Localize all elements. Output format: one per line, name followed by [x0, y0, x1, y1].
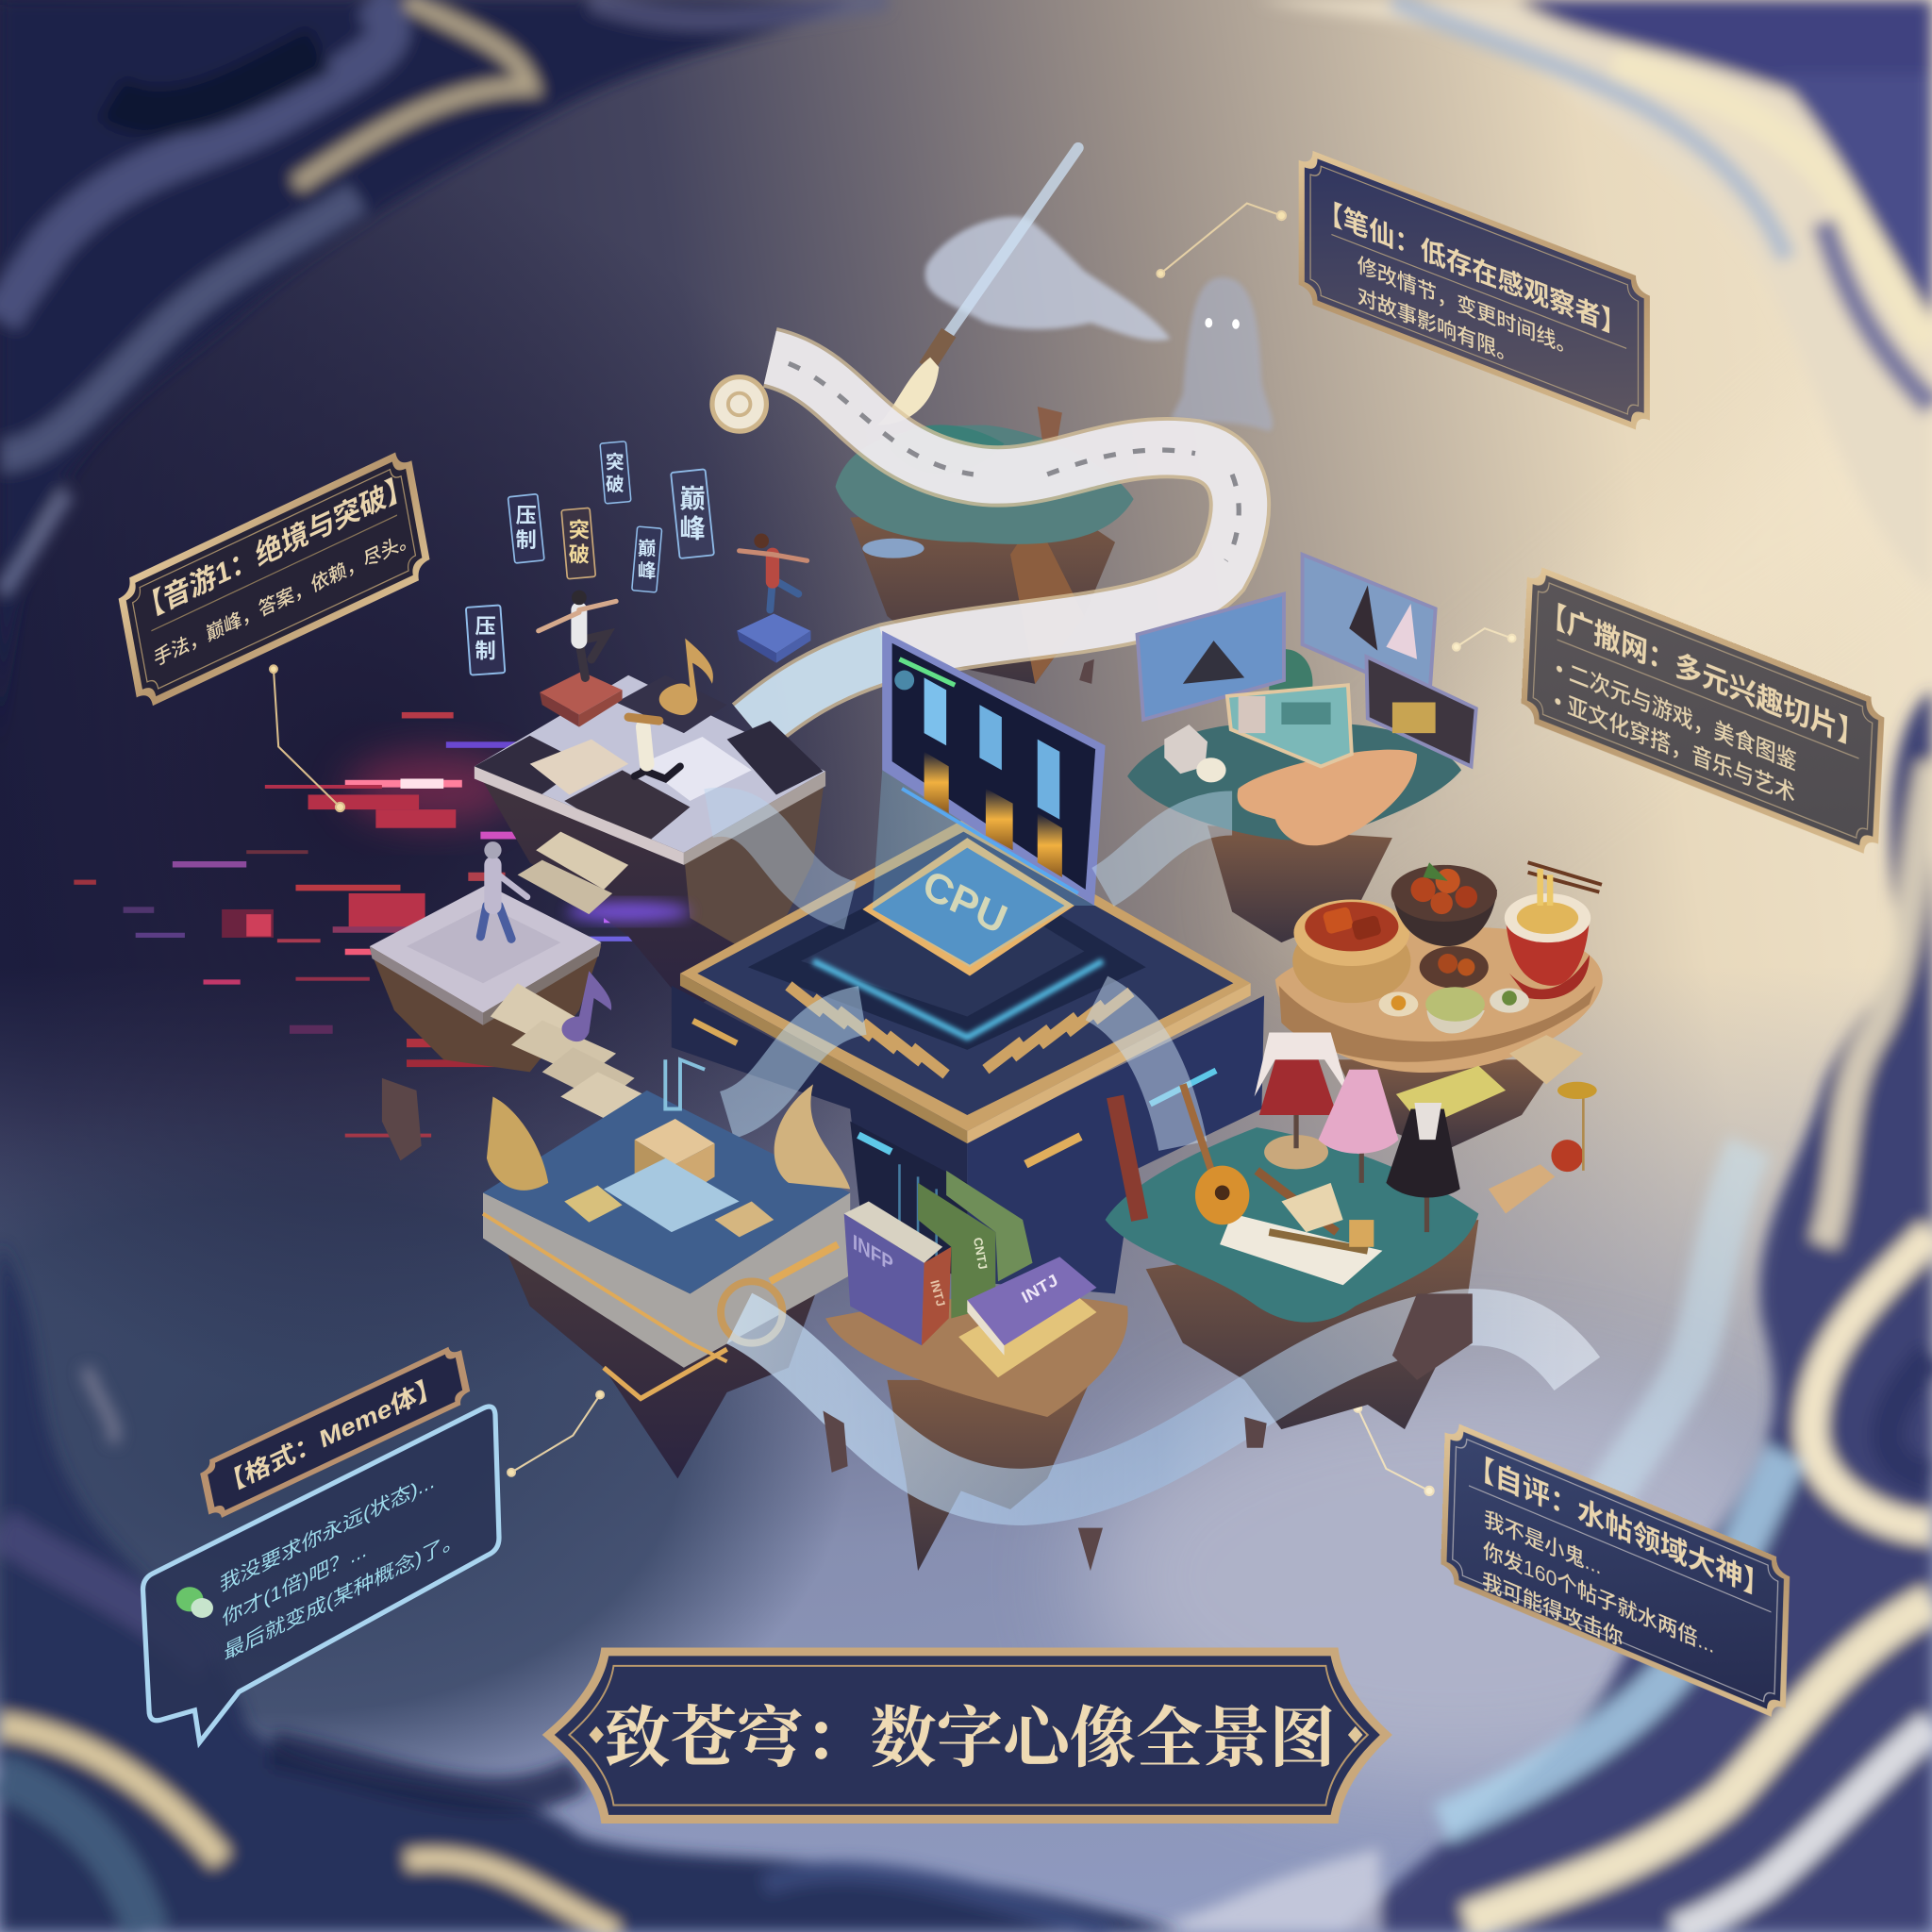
- floating tag: suppress one: [466, 605, 505, 675]
- floating tag: breakthrough one: [561, 508, 595, 579]
- MBTI books: INTJ: [1018, 1270, 1060, 1307]
- panel title: 【格式：Meme体】: [217, 1370, 444, 1501]
- callout line: self review: [1354, 1405, 1434, 1495]
- central processor platform: [680, 820, 1251, 1143]
- callout line: wide interests: [1453, 628, 1516, 651]
- panel body third line: 我可能得攻击你: [1482, 1569, 1624, 1651]
- hologram rays: [873, 770, 1096, 967]
- panel body: • 二次元与游戏，美食图鉴: [1555, 655, 1797, 775]
- dancer figures on blocks: [480, 534, 810, 939]
- panel body second line: • 亚文化穿搭，音乐与艺术: [1554, 688, 1796, 808]
- floating tag: peak two: 巅: [679, 484, 706, 513]
- scroll ribbon with writing: [712, 358, 1240, 727]
- ghost hand holding brush: [877, 148, 1171, 425]
- floating tag: peak two: 峰: [679, 513, 706, 542]
- MBTI books: [844, 1171, 1096, 1377]
- panel body second line: 你发160个帖子就水两倍...: [1483, 1538, 1715, 1657]
- processor chip with pins: [748, 838, 1146, 1074]
- message line three: 最后就变成(某种概念)了。: [224, 1525, 463, 1664]
- swirling ink frame: bottom left: [0, 1244, 1183, 1932]
- floating tag: peak two: [671, 469, 714, 558]
- floating tag: suppress two: 制: [516, 528, 537, 552]
- panel title: 【广撒网：多元兴趣切片】: [1539, 594, 1865, 756]
- panel: writer: [1299, 145, 1650, 435]
- steamer with braised pork: [1292, 899, 1411, 1003]
- MBTI books: INTJ: [927, 1278, 948, 1307]
- panel body: 手法，巅峰，答案，依赖，尽头。: [152, 526, 418, 671]
- floating tag: suppress one: 压: [475, 614, 496, 638]
- swirling ink frame: top right: [1257, 0, 1932, 591]
- title text: 致苍穹：数字心像全景图: [604, 1702, 1336, 1775]
- title banner: [542, 1647, 1392, 1824]
- stair slabs: [491, 832, 653, 1127]
- left data stream: [708, 812, 850, 906]
- panel title: 【笔仙：低存在感观察者】: [1318, 193, 1626, 344]
- panel: format: [198, 1341, 472, 1523]
- floating tag: suppress two: [508, 494, 544, 563]
- panel: self review: [1441, 1418, 1790, 1723]
- swirling ink frame: top left: [0, 0, 887, 764]
- icon: wechat: [176, 1587, 213, 1618]
- processor chip with pins: CPU: [920, 859, 1010, 945]
- guitar and instruments: [1115, 1084, 1368, 1251]
- swirling ink frame: right side: [1134, 690, 1932, 1932]
- mannequins with dresses: [1255, 1033, 1460, 1247]
- panel title: 【音游1：绝境与突破】: [135, 468, 415, 628]
- MBTI books: CNTJ: [971, 1237, 991, 1271]
- floating tag: suppress two: 压: [516, 504, 537, 527]
- callout line: writer: [1157, 204, 1286, 277]
- food island: [1275, 927, 1603, 1152]
- message line one: 我没要求你永远(状态)...: [220, 1469, 435, 1596]
- bowl of meat: [1391, 862, 1497, 946]
- lower left data stream: [727, 1010, 862, 1115]
- panel title: 【自评：水帖领域大神】: [1467, 1447, 1771, 1607]
- message line two: 你才(1倍)吧？...: [222, 1538, 367, 1630]
- floating tag: breakthrough two: [600, 441, 631, 504]
- central processor base walls: [672, 986, 1264, 1293]
- floating tag: breakthrough two: 破: [606, 475, 625, 495]
- music notes: [562, 639, 713, 1041]
- screen island: [1127, 649, 1461, 942]
- ghost figure: [1171, 277, 1273, 431]
- bottom flowing ribbon: [740, 1317, 1577, 1497]
- callout line: rhythm game: [270, 665, 344, 811]
- panel body: 修改情节，变更时间线。: [1357, 253, 1576, 360]
- bottom left machine island: [483, 1059, 850, 1478]
- floating tag: peak one: 峰: [638, 560, 657, 581]
- right data stream: [1103, 813, 1232, 887]
- floating tag: peak one: 巅: [638, 539, 657, 559]
- panel body second line: 对故事影响有限。: [1357, 284, 1516, 369]
- floating tag: peak one: [632, 526, 662, 592]
- floating screens: [1138, 555, 1476, 766]
- lower right data stream: [1096, 998, 1183, 1146]
- writer island: [836, 407, 1134, 684]
- callout line: format: [508, 1391, 604, 1476]
- fashion island: [1106, 1127, 1478, 1429]
- book island: [825, 1295, 1128, 1571]
- panel body: 我不是小鬼...: [1484, 1507, 1602, 1579]
- small dishes: [1379, 946, 1597, 1214]
- noodle bowl and chopsticks: [1505, 862, 1602, 999]
- floating tag: breakthrough one: 破: [569, 543, 590, 567]
- panel: rhythm game: [116, 446, 432, 712]
- rhythm game screen: [882, 631, 1106, 906]
- glitch bars: red and purple data fragments: [74, 712, 702, 1138]
- MBTI books: INFP: [853, 1229, 893, 1276]
- panel: wide interests: [1521, 562, 1885, 858]
- floating tag: breakthrough two: 突: [606, 451, 625, 473]
- rhythm game island: [475, 675, 825, 1010]
- falling rock fragments: [382, 659, 1473, 1571]
- chat bubble: [143, 1407, 499, 1742]
- floating tag: breakthrough one: 突: [569, 518, 590, 541]
- lower stone platform: [370, 885, 601, 1072]
- floating tag: suppress one: 制: [475, 639, 496, 662]
